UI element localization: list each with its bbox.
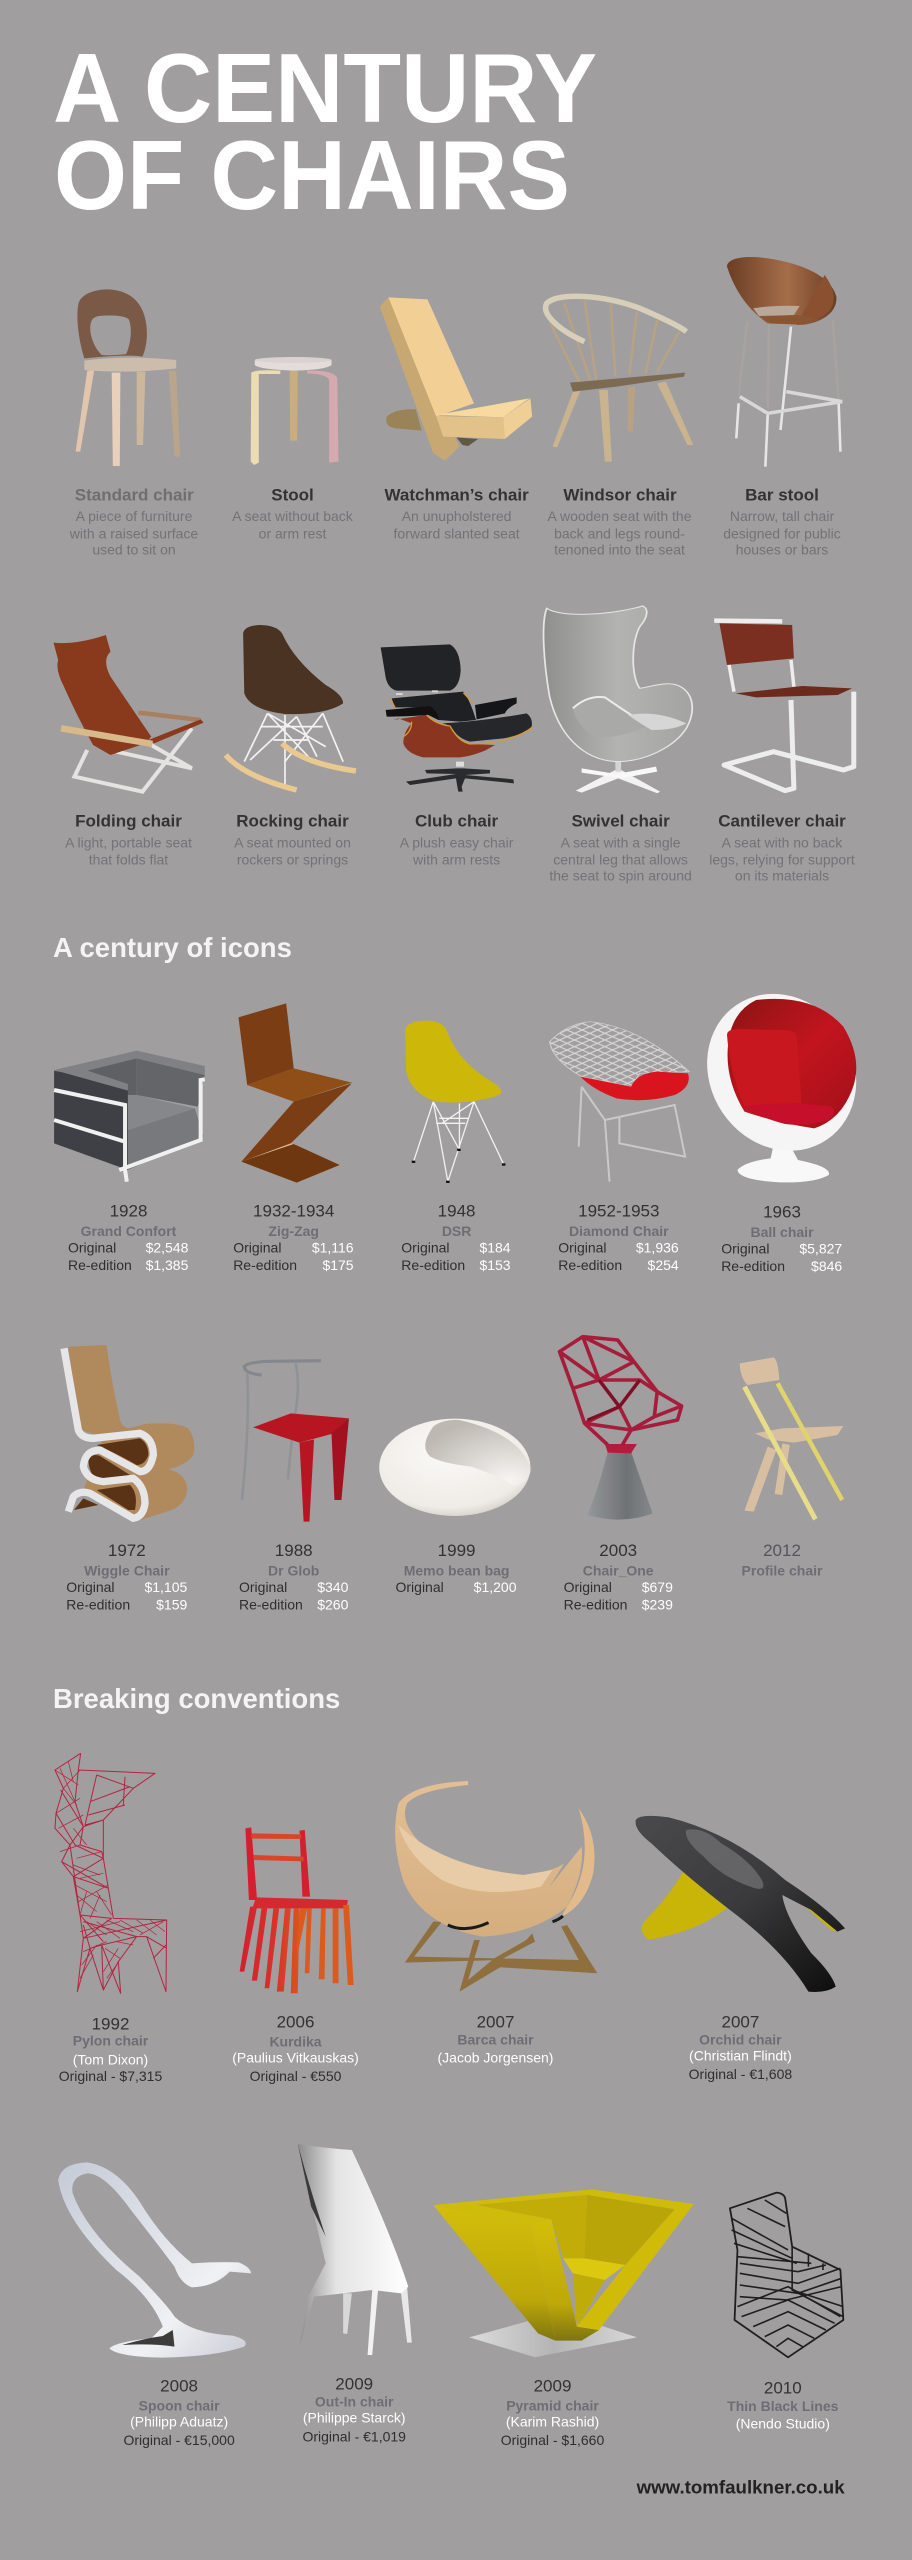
label: dsr: $153 — [479, 1257, 511, 1273]
label: windsor chair — [548, 486, 692, 558]
label: chair one: Original — [564, 1579, 612, 1595]
label: rocking chair — [234, 812, 351, 867]
label: bar stool: Bar stool — [745, 486, 819, 505]
label: dr glob — [239, 1541, 349, 1612]
chair: thin black lines — [730, 2193, 843, 2357]
chair: zig-zag — [238, 1003, 352, 1183]
label: rocking chair: A seat mounted on — [234, 834, 351, 850]
label: diamond chair: $1,936 — [636, 1240, 679, 1256]
label: barca chair: 2007 — [477, 2012, 514, 2031]
label: chair one: 2003 — [599, 1541, 637, 1560]
label: wiggle chair: $159 — [156, 1596, 188, 1612]
label: thin black lines: Thin Black Lines — [727, 2398, 839, 2414]
chair: standard chair — [76, 289, 180, 466]
label: folding chair: Folding chair — [75, 812, 182, 831]
label: out-in chair: Out-In chair — [315, 2393, 394, 2409]
label: ball chair: $846 — [811, 1258, 842, 1274]
label: dsr: Re-edition — [401, 1257, 465, 1273]
label: zig-zag: Zig-Zag — [268, 1223, 319, 1239]
label: memo bean bag: $1,200 — [474, 1579, 517, 1595]
label: watchman's chair: An unupholstered — [402, 508, 511, 524]
label: barca chair: Barca chair — [457, 2031, 534, 2047]
label: dr glob: Original — [239, 1579, 287, 1595]
label: thin black lines: (Nendo Studio) — [736, 2415, 830, 2431]
title: A CENTURY — [53, 33, 597, 143]
chair: spoon chair — [58, 2162, 251, 2358]
label: kurdika: (Paulius Vitkauskas) — [232, 2049, 359, 2065]
label: wiggle chair — [66, 1541, 188, 1612]
label: spoon chair: Spoon chair — [139, 2397, 220, 2413]
label: dr glob: $260 — [317, 1596, 349, 1612]
chair: rocking chair — [226, 625, 356, 790]
label: windsor chair: back and legs round- — [554, 525, 685, 541]
chair: profile chair — [740, 1357, 843, 1519]
label: bar stool: designed for public — [723, 525, 841, 541]
label: pylon chair: Original - $7,315 — [59, 2068, 162, 2084]
label: out-in chair: (Philippe Starck) — [303, 2410, 406, 2426]
label: memo bean bag — [396, 1541, 517, 1595]
label: diamond chair: 1952-1953 — [578, 1202, 659, 1221]
chair: grand confort — [54, 1051, 205, 1182]
label: standard chair: Standard chair — [75, 486, 194, 505]
label: zig-zag: $1,116 — [312, 1240, 354, 1256]
label: kurdika: Original - €550 — [250, 2068, 342, 2084]
label: zig-zag — [233, 1202, 354, 1273]
label: zig-zag: Original — [233, 1240, 281, 1256]
label: swivel chair: the seat to spin around — [549, 868, 692, 884]
label: cantilever chair: A seat with no back — [722, 834, 843, 850]
heading: a century of icons: A century of icons — [53, 932, 292, 963]
label: wiggle chair: $1,105 — [144, 1579, 188, 1595]
label: grand confort: $2,548 — [146, 1240, 189, 1256]
label: standard chair: used to sit on — [92, 542, 176, 558]
label: club chair: Club chair — [415, 812, 499, 831]
label: pyramid chair: Pyramid chair — [506, 2397, 599, 2413]
label: grand confort: Original — [68, 1240, 116, 1256]
chair: watchman's chair — [380, 297, 532, 461]
panel: chair types row 2 — [54, 606, 855, 884]
label: standard chair: A piece of furniture — [76, 508, 193, 524]
label: barca chair — [438, 2012, 553, 2065]
label: memo bean bag: Original — [396, 1579, 444, 1595]
chair: windsor chair — [546, 296, 693, 462]
label: dr glob: Dr Glob — [268, 1562, 319, 1578]
label: kurdika: 2006 — [277, 2012, 314, 2031]
label: wiggle chair: Re-edition — [66, 1596, 130, 1612]
label: zig-zag: 1932-1934 — [253, 1202, 334, 1221]
label: pylon chair: (Tom Dixon) — [73, 2051, 148, 2067]
label: spoon chair: 2008 — [160, 2377, 198, 2396]
label: standard chair: with a raised surface — [69, 525, 198, 541]
label: orchid chair: (Christian Flindt) — [689, 2047, 792, 2063]
chair: ball chair — [696, 990, 867, 1182]
label: club chair: A plush easy chair — [400, 834, 514, 850]
label: watchman's chair — [384, 486, 529, 541]
label: out-in chair — [302, 2374, 406, 2444]
chair: chair one — [559, 1337, 682, 1520]
label: diamond chair: Original — [558, 1240, 607, 1256]
label: stool — [232, 486, 354, 541]
label: grand confort: $1,385 — [146, 1257, 189, 1273]
label: grand confort: Grand Confort — [81, 1223, 177, 1239]
label: diamond chair — [558, 1202, 679, 1273]
label: swivel chair: A seat with a single — [561, 834, 681, 850]
label: pyramid chair — [501, 2377, 604, 2448]
label: thin black lines: 2010 — [764, 2378, 802, 2397]
label: chair one: $679 — [642, 1579, 673, 1595]
chair: barca chair — [395, 1781, 597, 1992]
label: ball chair: $5,827 — [799, 1241, 842, 1257]
label: out-in chair: 2009 — [335, 2374, 373, 2393]
chair: out-in chair — [298, 2144, 412, 2355]
label: memo bean bag: Memo bean bag — [404, 1562, 509, 1578]
label: profile chair: Profile chair — [742, 1562, 823, 1578]
label: pylon chair: 1992 — [92, 2014, 129, 2033]
label: orchid chair: 2007 — [721, 2012, 759, 2031]
label: thin black lines — [727, 2378, 839, 2431]
label: pyramid chair: (Karim Rashid) — [506, 2413, 599, 2429]
label: chair one: Re-edition — [564, 1596, 627, 1612]
chair: cantilever chair — [714, 621, 854, 791]
label: wiggle chair: 1972 — [108, 1541, 146, 1560]
chair: folding chair — [54, 635, 204, 792]
label: wiggle chair: Wiggle Chair — [84, 1562, 170, 1578]
label: folding chair: that folds flat — [89, 851, 168, 867]
label: dr glob: $340 — [317, 1579, 349, 1595]
panel: breaking conventions row 2 — [58, 2144, 843, 2448]
label: grand confort: Re-edition — [68, 1257, 132, 1273]
panel: chair types row 1 — [69, 257, 842, 558]
chair: pylon chair — [55, 1753, 167, 1993]
label: chair one — [564, 1541, 673, 1612]
label: kurdika — [232, 2012, 359, 2084]
label: rocking chair: Rocking chair — [236, 812, 349, 831]
label: pylon chair: Pylon chair — [73, 2033, 149, 2049]
label: out-in chair: Original - €1,019 — [302, 2428, 406, 2444]
title: OF CHAIRS — [54, 120, 570, 230]
label: windsor chair: Windsor chair — [563, 486, 677, 505]
label: watchman's chair: forward slanted seat — [394, 525, 520, 541]
label: folding chair: A light, portable seat — [65, 834, 192, 850]
label: stool: A seat without back — [232, 508, 354, 524]
label: ball chair: Ball chair — [750, 1224, 814, 1240]
label: orchid chair — [689, 2012, 792, 2082]
chair: club chair — [381, 644, 533, 792]
heading: breaking conventions: Breaking conventions — [53, 1683, 340, 1714]
label: stool: Stool — [271, 486, 314, 505]
label: club chair: with arm rests — [412, 851, 500, 867]
label: dr glob: Re-edition — [239, 1596, 303, 1612]
footer url: www.tomfaulkner.co.uk — [636, 2476, 845, 2497]
label: ball chair: 1963 — [763, 1203, 801, 1222]
label: bar stool: houses or bars — [736, 542, 828, 558]
chair: kurdika — [240, 1827, 354, 1993]
label: ball chair — [721, 1203, 842, 1274]
label: diamond chair: Re-edition — [558, 1257, 622, 1273]
label: grand confort — [68, 1202, 189, 1273]
label: standard chair — [69, 486, 198, 558]
label: dsr: $184 — [479, 1240, 511, 1256]
label: folding chair — [65, 812, 192, 867]
label: dsr: DSR — [442, 1223, 471, 1239]
label: spoon chair — [123, 2377, 235, 2448]
label: pyramid chair: 2009 — [534, 2377, 571, 2396]
label: club chair — [400, 812, 514, 867]
label: windsor chair: A wooden seat with the — [548, 508, 692, 524]
title — [53, 33, 597, 230]
label: ball chair: Original — [721, 1241, 769, 1257]
label: chair one: Chair_One — [583, 1562, 654, 1578]
label: profile chair — [742, 1541, 823, 1578]
label: zig-zag: Re-edition — [233, 1257, 297, 1273]
label: dr glob: 1988 — [275, 1541, 313, 1560]
chair: swivel chair — [544, 606, 692, 793]
panel: breaking conventions row 1 — [55, 1753, 845, 2084]
label: ball chair: Re-edition — [721, 1258, 785, 1274]
label: watchman's chair: Watchman’s chair — [384, 486, 529, 505]
chair: pyramid chair — [433, 2189, 694, 2357]
label: bar stool: Narrow, tall chair — [730, 508, 834, 524]
label: windsor chair: tenoned into the seat — [554, 542, 685, 558]
label: dsr: Original — [401, 1240, 450, 1256]
label: cantilever chair: legs, relying for support — [709, 851, 855, 867]
chair: diamond chair — [550, 1022, 689, 1182]
label: dsr — [401, 1202, 511, 1273]
label: bar stool — [723, 486, 841, 558]
label: kurdika: Kurdika — [269, 2033, 322, 2049]
label: orchid chair: Orchid chair — [699, 2031, 782, 2047]
panel: icons row 2 — [64, 1337, 843, 1612]
label: swivel chair — [549, 812, 692, 884]
label: orchid chair: Original - €1,608 — [689, 2066, 792, 2082]
chair: dr glob — [242, 1361, 349, 1522]
label: pyramid chair: Original - $1,660 — [501, 2432, 604, 2448]
label: memo bean bag: 1999 — [438, 1541, 476, 1560]
chair: wiggle chair — [64, 1345, 194, 1521]
label: spoon chair: Original - €15,000 — [123, 2432, 235, 2448]
chair: bar stool — [727, 257, 842, 467]
panel: icons row 1 — [54, 990, 867, 1274]
label: spoon chair: (Philipp Aduatz) — [130, 2413, 228, 2429]
label: dsr: 1948 — [438, 1202, 476, 1221]
label: profile chair: 2012 — [763, 1541, 801, 1560]
label: cantilever chair: Cantilever chair — [718, 812, 846, 831]
chair: stool — [251, 357, 338, 465]
label: cantilever chair: on its materials — [735, 868, 829, 884]
label: pylon chair — [59, 2014, 162, 2084]
chair: orchid chair — [636, 1816, 845, 1992]
label: barca chair: (Jacob Jorgensen) — [438, 2049, 553, 2065]
label: swivel chair: central leg that allows — [553, 851, 688, 867]
label: chair one: $239 — [642, 1596, 673, 1612]
chair: memo bean bag — [379, 1419, 531, 1516]
label: wiggle chair: Original — [66, 1579, 115, 1595]
label: diamond chair: Diamond Chair — [569, 1223, 669, 1239]
label: rocking chair: rockers or springs — [237, 851, 348, 867]
label: diamond chair: $254 — [648, 1257, 679, 1273]
label: cantilever chair — [709, 812, 855, 884]
chair: dsr — [405, 1021, 505, 1183]
label: grand confort: 1928 — [110, 1202, 147, 1221]
label: swivel chair: Swivel chair — [571, 812, 670, 831]
label: zig-zag: $175 — [322, 1257, 354, 1273]
label: stool: or arm rest — [259, 525, 326, 541]
